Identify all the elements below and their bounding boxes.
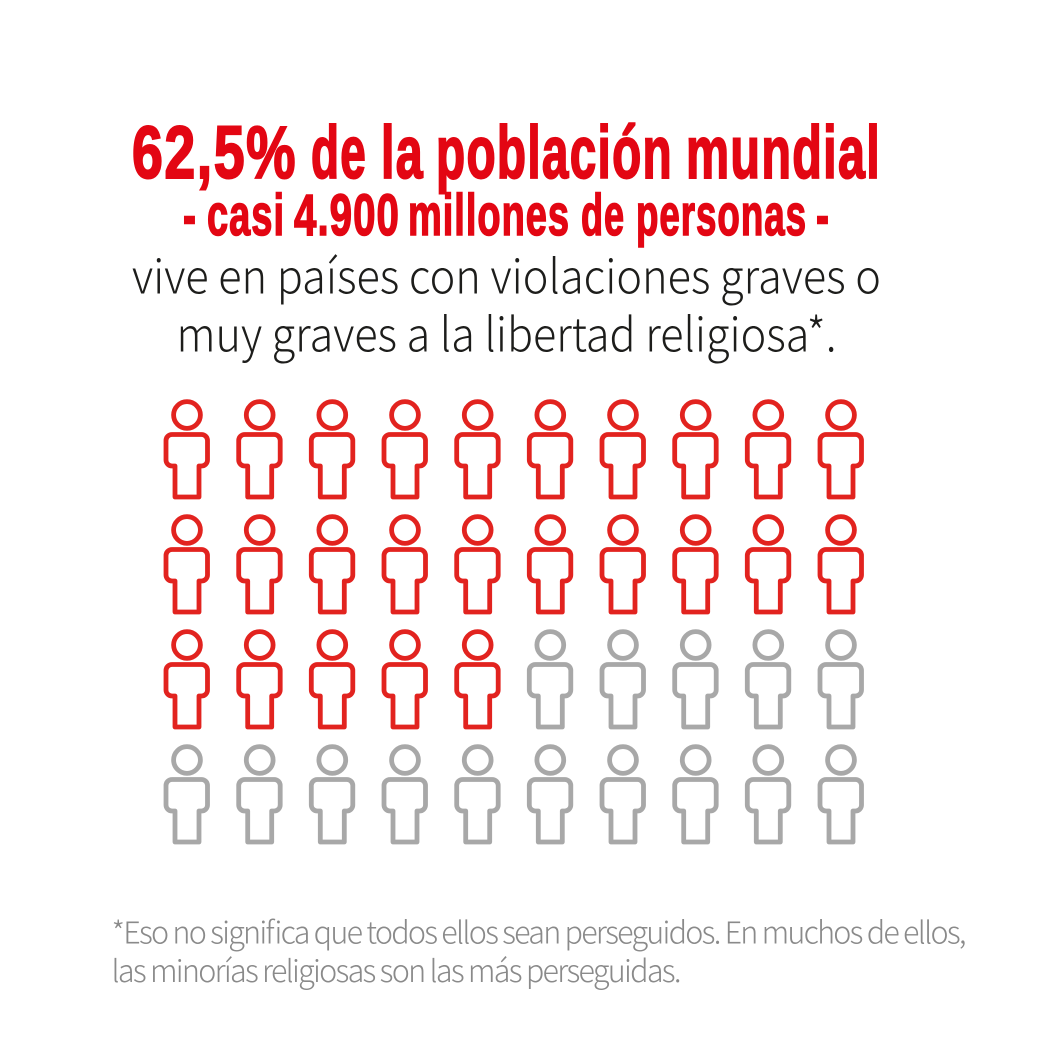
text block: description [132, 238, 881, 366]
subtitle: number of people: millones [408, 183, 570, 248]
subtitle: number of people [183, 183, 830, 248]
subtitle: number of people: - [816, 183, 830, 248]
title: headline percentage [132, 111, 881, 194]
footnote: las minorías religiosas son las más perseguidas. [112, 947, 682, 991]
text block: description: muy graves a la libertad religiosa*. [176, 296, 836, 366]
title: headline percentage: mundial [686, 111, 881, 194]
title: headline percentage: población [436, 111, 673, 194]
subtitle: number of people: casi [207, 183, 285, 248]
row 4: ten gray people [166, 747, 862, 842]
title: headline percentage: 62,5% [132, 111, 297, 194]
title: headline percentage: la [381, 111, 424, 194]
footnote: *Eso no significa que todos ellos sean perseguidos. En muchos de ellos, [112, 908, 967, 952]
title: headline percentage: de [311, 111, 367, 194]
text block: description: vive en países con violaciones graves o [132, 238, 881, 308]
subtitle: number of people: - [183, 183, 197, 248]
footnote [112, 908, 967, 991]
row 3: five red and five gray people [166, 632, 862, 727]
subtitle: number of people: 4.900 [294, 183, 400, 248]
pictogram chart: 62.5 percent of 40 people [166, 402, 862, 842]
subtitle: number of people: personas [636, 183, 807, 248]
row 1: ten red people [166, 402, 862, 497]
subtitle: number of people: de [581, 183, 625, 248]
row 2: ten red people [166, 517, 862, 612]
